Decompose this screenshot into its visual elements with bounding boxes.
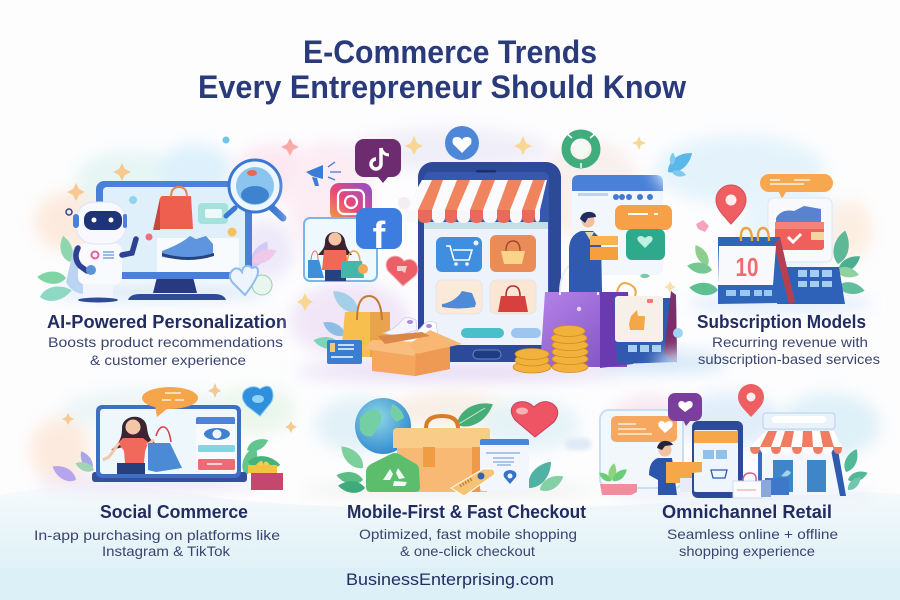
monitor: [96, 181, 252, 300]
leaves: [335, 442, 566, 495]
icon: Instagram: [330, 183, 372, 221]
panel: central marketplace: [288, 126, 683, 380]
purple shopping bag: [540, 263, 633, 368]
product tile: orange bag: [490, 235, 536, 272]
icon: potted plant: [597, 463, 637, 495]
browser window: [572, 175, 663, 275]
description: & customer experience: [90, 352, 246, 368]
leaves: [841, 447, 869, 493]
icon: heart bubble: [445, 126, 479, 160]
phone: [692, 421, 743, 498]
description: [667, 526, 838, 559]
icon: red heart: [511, 402, 558, 437]
description: shopping experience: [679, 543, 815, 559]
subscription box card: [768, 198, 832, 262]
yellow shopping bag: [341, 296, 390, 357]
cardboard box: [364, 330, 462, 376]
icon: globe: [355, 398, 411, 454]
white sneakers: [383, 317, 438, 343]
icon: green leaf: [452, 396, 497, 432]
icon: Facebook: [356, 208, 402, 257]
gift box: [248, 461, 283, 490]
heading: Subscription Models: [697, 312, 866, 332]
heading: Social Commerce: [100, 502, 248, 522]
icon: red heart: [386, 256, 418, 286]
credit card: [327, 340, 362, 364]
tablet device: [92, 405, 247, 482]
discount tag: [451, 469, 495, 496]
icon: location pin: [716, 185, 746, 224]
title: Every Entrepreneur Should Know: [198, 69, 686, 105]
awning: [398, 180, 547, 223]
background blobs: [30, 386, 295, 490]
heading: AI-Powered Personalization: [47, 312, 287, 332]
product tile: cart: [436, 237, 482, 272]
description: & one-click checkout: [400, 543, 535, 559]
calendar: 10: [736, 252, 758, 282]
panel: omnichannel retail: [597, 384, 880, 559]
speech card: [600, 410, 683, 488]
background blobs: [300, 392, 600, 498]
title: E-Commerce Trends: [303, 34, 597, 70]
description: Optimized, fast mobile shopping: [359, 526, 577, 542]
speech bubble: [142, 387, 198, 417]
product tile: red handbag: [490, 280, 536, 314]
sparkles: [67, 163, 131, 201]
calendar: [718, 228, 795, 304]
panel: AI-powered personalization: [34, 136, 315, 368]
businessman with box: [649, 441, 702, 495]
background blobs: [605, 392, 880, 500]
title: [198, 34, 686, 105]
icon: white heart hand: [230, 266, 272, 295]
icon: blue feather leaf: [664, 148, 696, 178]
description: In-app purchasing on platforms like: [34, 527, 280, 543]
icon: red shopping bag: [153, 187, 193, 230]
speech bubble: [760, 174, 833, 199]
photo card: woman shopper: [304, 218, 377, 281]
chat bubbles: [615, 205, 672, 260]
icon: blue sneaker: [162, 236, 214, 260]
panel: subscription models: [632, 135, 880, 372]
description: [34, 527, 280, 559]
description: Recurring revenue with: [712, 334, 868, 350]
browser window: [480, 439, 529, 491]
description: [48, 334, 283, 368]
shopping bags: [733, 473, 789, 498]
footer website: BusinessEnterprising.com: [346, 571, 554, 589]
description: Instagram & TikTok: [102, 543, 231, 559]
woman with shopping bag: [103, 417, 182, 474]
sparkles: [62, 383, 297, 433]
background blobs: [654, 135, 875, 372]
panel: social commerce: [30, 383, 297, 559]
payment panel: [777, 267, 845, 304]
description: Seamless online + offline: [667, 526, 838, 542]
leaves: [686, 229, 866, 296]
small leaf and sparkle: [640, 274, 683, 338]
icon: blue heart: [242, 386, 273, 416]
product tile: sneaker: [436, 280, 482, 314]
leaves: [50, 435, 281, 485]
wrapped document: [565, 438, 591, 450]
background blobs: [34, 144, 315, 301]
description: Boosts product recommendations: [48, 334, 283, 350]
description: subscription-based services: [698, 351, 880, 367]
phone: [418, 162, 561, 362]
sparkles: [297, 136, 532, 311]
icon: magnifying glass: [226, 160, 283, 218]
icon: robot: [66, 202, 136, 302]
panel: mobile-first and fast checkout: [300, 392, 600, 559]
heading: Mobile-First & Fast Checkout: [347, 502, 586, 522]
icon: recycle: [566, 133, 596, 168]
icon: Facebook: f: [373, 215, 386, 257]
stand-up calendar card: [614, 283, 677, 364]
description: [359, 526, 577, 559]
icon: location pin: [738, 384, 764, 417]
icon: megaphone: [306, 162, 341, 186]
app card: [196, 417, 235, 471]
icon: purple heart bubble: [668, 393, 702, 426]
businessman with box: [569, 212, 618, 292]
icon: green recycle badge: [366, 453, 420, 492]
leaves: [312, 286, 362, 351]
diamond sparkle: [696, 220, 709, 232]
cardboard box: [393, 416, 490, 492]
leaves: [37, 234, 279, 304]
heading: Omnichannel Retail: [662, 502, 832, 522]
sparkle: [632, 136, 646, 150]
description: [698, 334, 880, 367]
gold coins: [513, 326, 588, 373]
background blobs: [288, 128, 680, 380]
icon: TikTok: [355, 139, 401, 183]
storefront: [750, 413, 846, 496]
